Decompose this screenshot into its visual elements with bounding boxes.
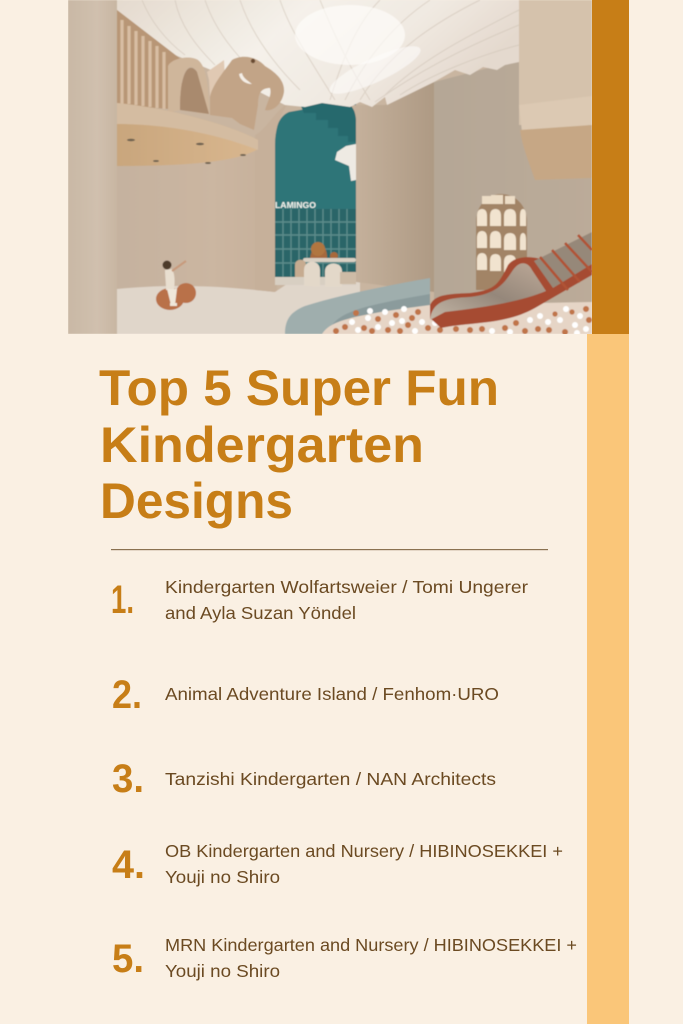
list item 2 [112,673,499,717]
number 2: 2. [112,673,142,717]
side bar: light orange [587,334,629,1024]
right wall [434,60,592,305]
title [99,360,499,529]
slide [430,232,592,328]
ceiling drapes [117,0,519,107]
number 3: 3. [112,757,144,801]
table and lion in teal room [295,242,356,287]
item 4 text: Youji no Shiro [165,867,280,887]
divider [111,549,548,550]
teal room [275,100,356,290]
balcony floor [117,103,258,166]
item 4 text [165,841,563,887]
ball pit [322,302,592,336]
curved wall pier [274,124,279,140]
title: Kindergarten [100,417,424,473]
balcony tunnel arch [168,57,203,110]
left column [80,0,106,334]
item 3 text: Tanzishi Kindergarten / NAN Architects [165,769,496,789]
sign: flamingo: LAMINGO [275,200,316,210]
item 5 text [165,935,577,981]
title: Top 5 Super Fun [99,360,499,416]
item 2 text: Animal Adventure Island / Fenhom·URO [165,684,499,704]
arched window [476,194,527,290]
item 5 text: MRN Kindergarten and Nursery / HIBINOSEKKEI + [165,935,577,955]
item 5 text: Youji no Shiro [165,961,280,981]
number 5: 5. [112,937,144,981]
child on lion rider [156,260,196,310]
list item 4 [112,841,563,887]
list item 5 [112,935,577,981]
photo: kindergarten interior [68,0,592,336]
elephant [207,57,284,130]
number 1: 1. [111,578,134,622]
item 4 text: OB Kindergarten and Nursery / HIBINOSEKKEI + [165,841,563,861]
title: Designs [100,473,293,529]
item 1 text [165,577,528,623]
list item 1 [111,577,528,623]
ball pit rim [285,278,430,334]
flamingo figure [335,144,356,181]
floor [117,282,360,334]
item 1 text: Kindergarten Wolfartsweier / Tomi Ungerer [165,577,528,597]
back wall [117,140,277,295]
list item 3 [112,757,496,801]
balcony slats [117,10,182,110]
centre column [350,82,434,292]
item 1 text: and Ayla Suzan Yöndel [165,603,356,623]
number 4: 4. [112,843,145,887]
side bar: dark orange [592,0,629,334]
upper right wood volume [519,0,592,180]
